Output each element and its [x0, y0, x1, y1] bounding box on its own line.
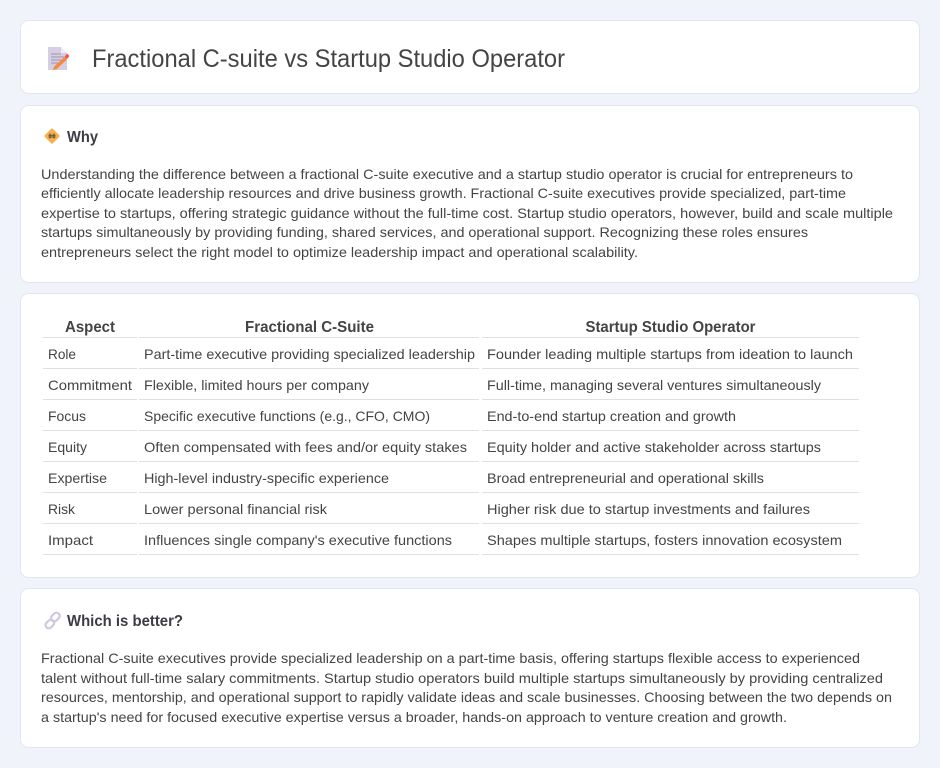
text block: why: efficiently allocate leadership resources and drive business growth. Fractional C-suite executives provide specialized, part-time — [41, 185, 846, 201]
row: expertise — [48, 470, 764, 486]
row: equity: Equity — [48, 439, 87, 455]
text block: why: expertise to startups, offering strategic guidance without the full-time cost. Startup studio operators, however, build and scale multiple — [41, 205, 893, 221]
heading: which is better: Which is better? — [67, 613, 183, 630]
row: role: Part-time executive providing specialized leadership — [144, 346, 475, 362]
text block: which is better: talent without full-time salary commitments. Startup studio operators build multiple startups simultaneously by providing centralized — [41, 670, 883, 686]
table header — [65, 319, 756, 336]
row: impact: Impact — [48, 532, 93, 548]
row: risk — [48, 501, 810, 517]
row: equity: Often compensated with fees and/or equity stakes — [144, 439, 467, 455]
row: impact: Shapes multiple startups, fosters innovation ecosystem — [487, 532, 842, 548]
row: commitment: Full-time, managing several ventures simultaneously — [487, 377, 821, 393]
title: Fractional C-suite vs Startup Studio Operator — [92, 45, 565, 73]
row: commitment: Commitment — [48, 377, 132, 393]
table header: Aspect — [65, 319, 116, 336]
text block: which is better: resources, mentorship, and operational support to rapidly validate ideas and scale businesses. Choosing between the two depends on — [41, 689, 892, 705]
text block: why: Understanding the difference between a fractional C-suite executive and a startup studio operator is crucial for entrepreneurs to — [41, 166, 853, 182]
icon: document with pencil — [48, 47, 70, 70]
panel: which is better — [20, 588, 920, 748]
row: risk: Higher risk due to startup investments and failures — [487, 501, 810, 517]
row: risk: Risk — [48, 501, 76, 517]
row: role: Role — [48, 346, 76, 362]
row: impact — [48, 532, 842, 548]
heading: why: Why — [67, 129, 98, 146]
text block: which is better: a startup's need for focused executive expertise versus a broader, hands-on approach to venture creation and growth. — [41, 709, 787, 725]
row: expertise: High-level industry-specific experience — [144, 470, 389, 486]
row: focus — [48, 408, 736, 424]
row: role: Founder leading multiple startups from ideation to launch — [487, 346, 853, 362]
panel: why — [20, 106, 920, 282]
row: focus: Focus — [48, 408, 86, 424]
text block: why — [41, 166, 893, 260]
row: focus: Specific executive functions (e.g., CFO, CMO) — [144, 408, 430, 424]
row: commitment: Flexible, limited hours per company — [144, 377, 369, 393]
row: equity — [48, 439, 821, 455]
row: expertise: Broad entrepreneurial and operational skills — [487, 470, 764, 486]
panel: comparison table — [20, 294, 920, 578]
row: risk: Lower personal financial risk — [144, 501, 328, 517]
text block: which is better — [41, 650, 892, 725]
table header: Startup Studio Operator — [586, 319, 756, 336]
table header: Fractional C-Suite — [245, 319, 374, 336]
text block: why: startups simultaneously by providing funding, shared services, and operational support. Recognizing these roles ensures — [41, 224, 808, 240]
row: commitment — [48, 377, 821, 393]
row: focus: End-to-end startup creation and growth — [487, 408, 736, 424]
row: expertise: Expertise — [48, 470, 107, 486]
icon: link — [44, 611, 61, 630]
text block: which is better: Fractional C-suite executives provide specialized leadership on a part-time basis, offering startups flexible access to experienced — [41, 650, 860, 666]
panel: header — [20, 20, 920, 94]
icon: warning diamond — [44, 128, 60, 144]
row: equity: Equity holder and active stakeholder across startups — [487, 439, 821, 455]
row: role — [48, 346, 853, 362]
text block: why: entrepreneurs select the right model to optimize leadership impact and operational scalability. — [41, 244, 638, 260]
row: impact: Influences single company's executive functions — [144, 532, 452, 548]
